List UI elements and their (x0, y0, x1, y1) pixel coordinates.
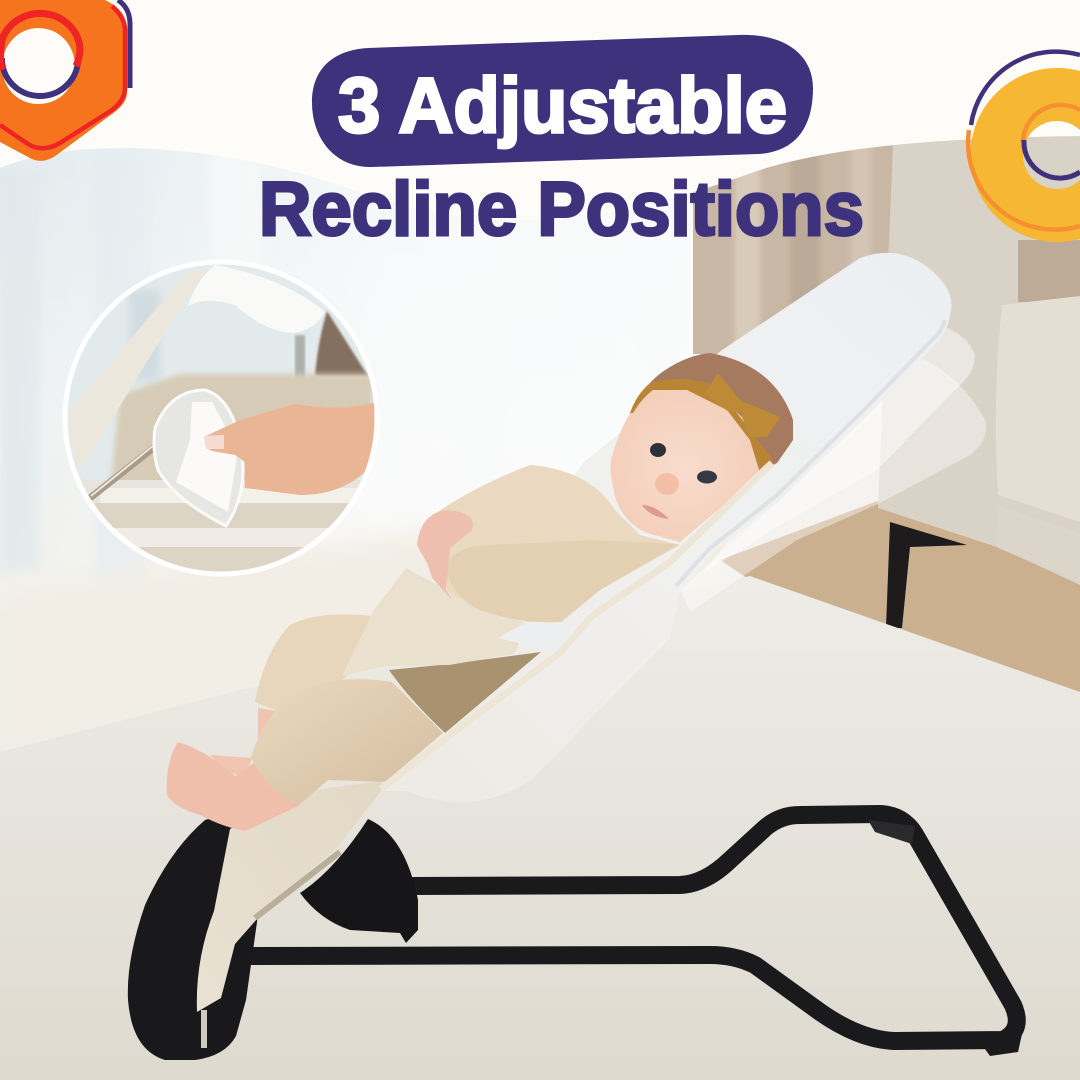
seat fabric ghost positions (680, 325, 986, 612)
eyes (650, 443, 666, 457)
decorative yellow ring (968, 52, 1080, 242)
ghost position two (680, 358, 986, 612)
belly pad (342, 568, 528, 676)
cream wave header (0, 0, 1080, 220)
back foot (210, 755, 252, 776)
front foot (167, 742, 300, 831)
heading pill (312, 35, 813, 167)
rod (201, 1010, 207, 1048)
fabric strip (68, 268, 212, 476)
hand (205, 402, 376, 495)
inset circle: recline adjuster detail (60, 255, 385, 580)
white strap (498, 621, 580, 654)
wood floor right (720, 500, 1080, 695)
front base (128, 819, 258, 1060)
front pants (251, 679, 443, 804)
metal rod (88, 444, 153, 501)
decorative orange hexagon (0, 0, 130, 161)
head (610, 353, 793, 542)
end clip (980, 1034, 1022, 1056)
back ankle (258, 708, 282, 738)
rug (0, 576, 1080, 1080)
brown curtain detail (315, 311, 368, 376)
sofa (878, 132, 1080, 585)
ghost position one (700, 325, 975, 575)
baby (167, 353, 793, 831)
sofa leg (886, 522, 967, 628)
heading line 1: 3 Adjustable (338, 61, 787, 149)
heading line 2: Recline Positions (259, 167, 864, 252)
white seat end (188, 265, 325, 333)
back leg (255, 614, 372, 712)
mouth (642, 505, 669, 519)
lower fabric (197, 781, 381, 1012)
bouncer frame (245, 814, 1022, 1056)
rear tube (245, 814, 1017, 1041)
beige curtain (693, 130, 898, 354)
adjuster disc (154, 390, 243, 526)
seat piping (381, 463, 772, 789)
rear hub (300, 819, 418, 943)
lower sweater (389, 652, 541, 733)
white bar two (115, 528, 340, 547)
mesh edge (676, 320, 945, 586)
wood floor left (0, 530, 760, 750)
headband (630, 379, 773, 473)
hands (417, 510, 473, 600)
bow (705, 373, 780, 437)
white bar one (100, 488, 360, 503)
top clip (868, 820, 915, 844)
sweater body (426, 465, 680, 622)
sweater arm (446, 540, 678, 622)
nose (655, 473, 679, 495)
hair (650, 353, 793, 470)
sheer curtains (0, 130, 700, 610)
seat fabric (197, 253, 952, 1048)
metal support (255, 852, 340, 918)
